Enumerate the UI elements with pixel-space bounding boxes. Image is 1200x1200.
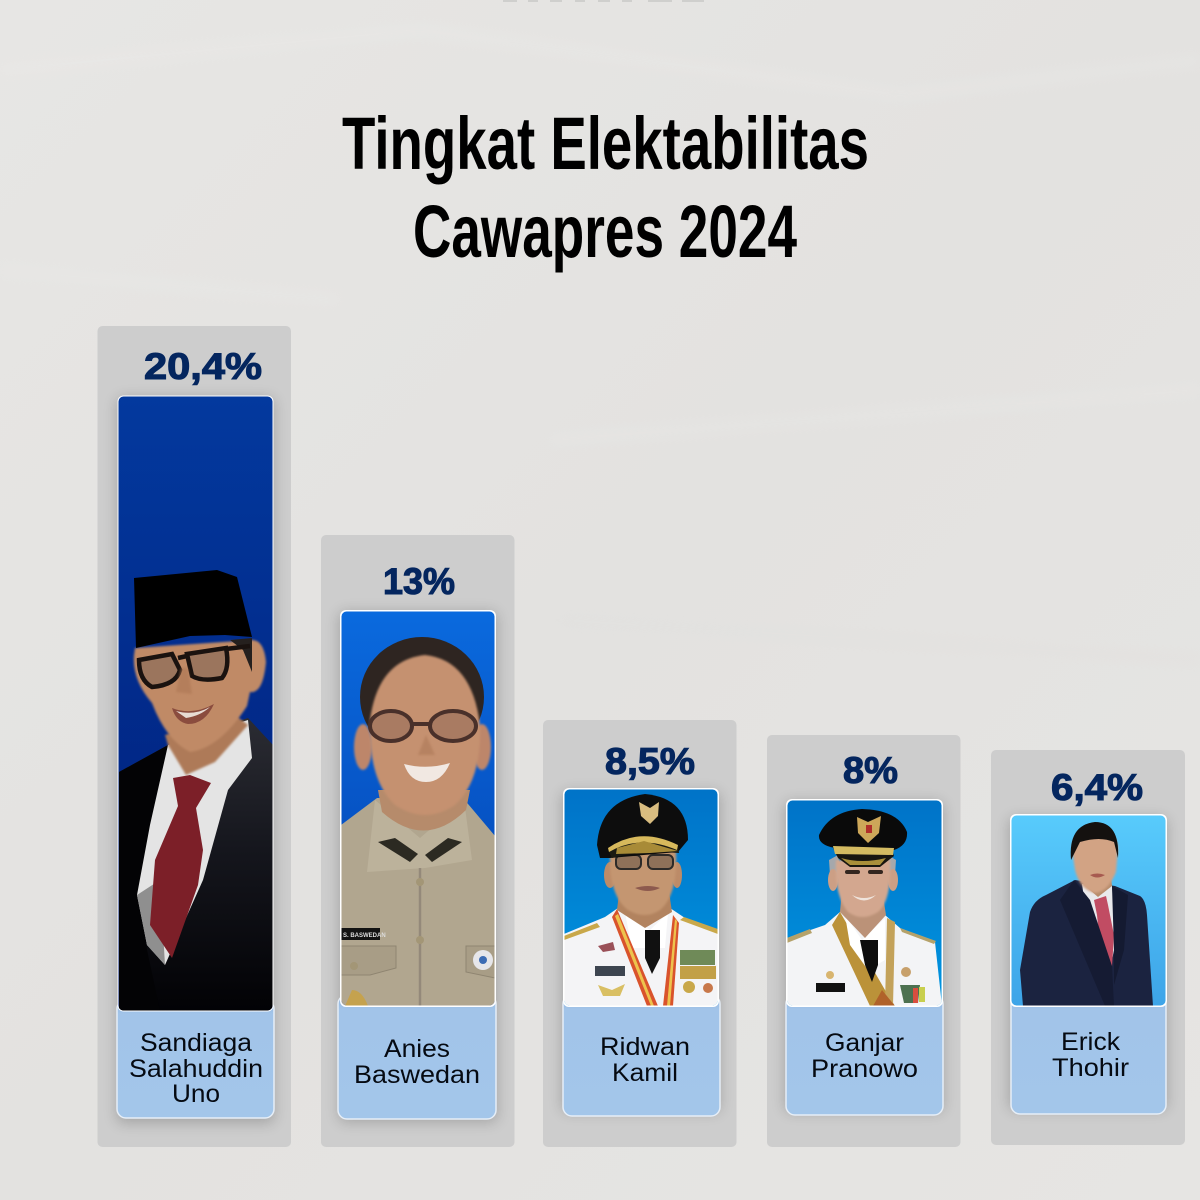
- nose: [177, 667, 191, 693]
- sash: [832, 912, 895, 1006]
- pockets and badge: [341, 946, 495, 978]
- name tag and medals: [816, 983, 845, 992]
- percentage: 6,4%: 6,4%: [1051, 767, 1143, 808]
- suit: [119, 718, 273, 1011]
- name tag: [340, 928, 380, 940]
- cap emblem: [857, 816, 881, 843]
- panel: Anies Baswedan, 13%: [321, 535, 514, 1147]
- white uniform: [787, 912, 942, 1006]
- neck: [840, 890, 886, 938]
- neck: [617, 894, 672, 928]
- panel: Ridwan Kamil, 8,5%: [543, 720, 736, 1147]
- shirt: [1082, 884, 1116, 960]
- white uniform: [564, 908, 718, 1006]
- neck: [1080, 870, 1112, 897]
- photo: Sandiaga: [118, 396, 274, 1012]
- suit: [1020, 880, 1153, 1006]
- photo: Anies: S. BASWEDAN: [343, 933, 386, 939]
- title: Cawapres 2024: [413, 190, 797, 273]
- name label: Ganjar Pranowo: Ganjar: [825, 1029, 904, 1057]
- face: [370, 655, 480, 815]
- mouth: [172, 704, 214, 724]
- panel: Erick Thohir, 6,4%: [991, 750, 1185, 1145]
- percentage: 8%: 8%: [843, 750, 898, 791]
- sash: [612, 909, 658, 1006]
- hair: [1071, 822, 1118, 860]
- medals: [680, 950, 715, 965]
- name label: Ridwan Kamil: [563, 995, 720, 1116]
- shirt: [137, 720, 252, 965]
- title: [342, 102, 869, 273]
- name label: Ridwan Kamil: Kamil: [612, 1059, 678, 1087]
- name label: Ridwan Kamil: Ridwan: [600, 1033, 690, 1061]
- name label: Anies Baswedan: Baswedan: [354, 1061, 480, 1089]
- ears: [604, 862, 614, 888]
- hat: [134, 570, 252, 648]
- face: [1072, 830, 1118, 893]
- face: [836, 860, 890, 917]
- face: [610, 850, 676, 915]
- hair: [829, 855, 896, 880]
- glasses: [370, 711, 476, 741]
- photo: Anies: [340, 610, 496, 1007]
- tie: [150, 775, 211, 958]
- glasses: [616, 855, 673, 869]
- neck: [165, 715, 248, 775]
- photo: Ganjar: [786, 799, 943, 1007]
- collar, tie: [846, 918, 885, 968]
- clipped text remnant at top edge: [503, 0, 704, 2]
- name label: Sandiaga Salahuddin Uno: Sandiaga: [140, 1029, 252, 1057]
- name label: Erick Thohir: Erick: [1061, 1028, 1121, 1056]
- panel: Ganjar Pranowo, 8%: [767, 735, 960, 1147]
- glasses: [139, 646, 250, 687]
- name label: Anies Baswedan: Anies: [384, 1035, 450, 1063]
- panel: Sandiaga Salahuddin Uno, 20,4%: [98, 326, 291, 1147]
- smile: [404, 763, 450, 782]
- uniform shirt: [341, 798, 495, 1006]
- percentage: 8,5%: 8,5%: [605, 741, 695, 782]
- name label: Sandiaga Salahuddin Uno: Uno: [172, 1080, 220, 1108]
- cap: [597, 794, 688, 858]
- title: Tingkat Elektabilitas: [342, 102, 869, 185]
- name label: Sandiaga Salahuddin Uno: Salahuddin: [129, 1055, 263, 1083]
- name label: Ganjar Pranowo: Pranowo: [811, 1055, 918, 1083]
- name label: Ganjar Pranowo: [786, 995, 943, 1115]
- cap: [819, 809, 907, 850]
- ears: [828, 869, 838, 891]
- name label: Erick Thohir: [1011, 995, 1166, 1114]
- photo: Erick Thohir: [1010, 814, 1167, 1007]
- neck: [378, 790, 470, 831]
- ears: [354, 724, 372, 770]
- name label: Anies Baswedan: [338, 995, 496, 1119]
- cap emblem: [639, 802, 659, 824]
- percentage: 13%: 13%: [383, 561, 455, 602]
- name label: Erick Thohir: Thohir: [1052, 1054, 1129, 1082]
- tie: [1094, 896, 1114, 967]
- hair: [230, 638, 252, 672]
- collar, tie: [625, 913, 668, 948]
- percentage: 20,4%: 20,4%: [144, 346, 262, 387]
- name label: Sandiaga Salahuddin Uno: [117, 1000, 274, 1118]
- face: [134, 640, 266, 752]
- hair: [360, 637, 484, 726]
- photo: Ridwan Kamil: [563, 788, 719, 1007]
